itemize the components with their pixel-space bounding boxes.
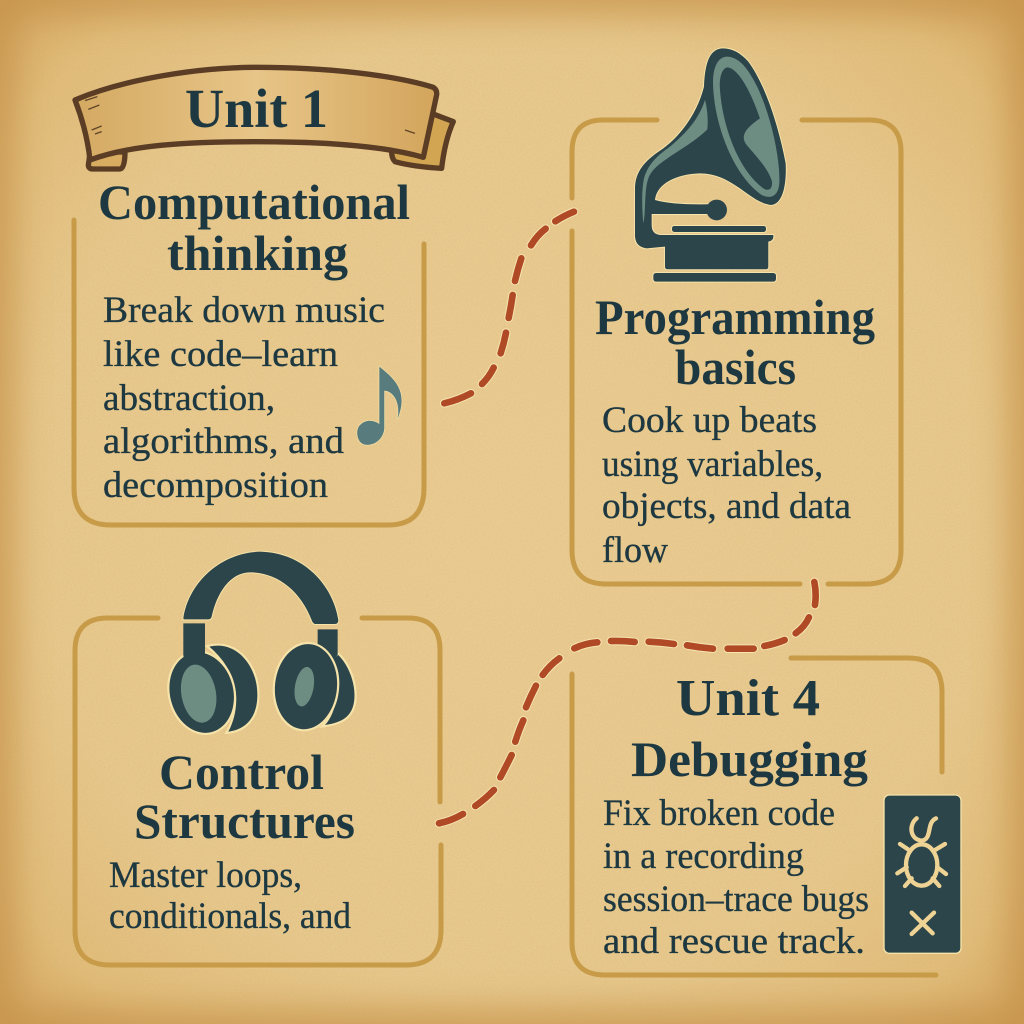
bug	[897, 818, 946, 886]
text: computational thinking description: abstraction,	[103, 378, 275, 419]
gramophone body and horn	[635, 48, 786, 269]
left outer cup	[209, 646, 257, 732]
right stem	[318, 629, 338, 662]
text: computational thinking description: decomposition	[103, 465, 328, 506]
heading: computational thinking	[98, 174, 410, 281]
heading: programming basics: Programming	[595, 289, 875, 345]
platter	[672, 226, 766, 232]
left ear pad	[177, 662, 221, 726]
heading: control structures: Structures	[134, 793, 355, 849]
base plate	[653, 273, 776, 282]
text: computational thinking description: like code–learn	[103, 334, 338, 375]
text: debugging description: Fix broken code	[603, 793, 835, 834]
arm ball	[706, 200, 727, 220]
horn mouth interior	[720, 67, 772, 190]
icon: headphones	[161, 552, 355, 740]
arrow: dashed path from unit 1 to programming basics	[444, 212, 574, 403]
text: computational thinking description	[103, 290, 385, 506]
text: programming basics description: objects, and data	[602, 486, 851, 527]
text: programming basics description: Cook up beats	[602, 400, 817, 441]
left ear cup	[161, 646, 242, 740]
text: debugging description	[603, 793, 869, 962]
text: computational thinking description: Break down music	[103, 290, 385, 331]
right ear cup	[271, 641, 341, 732]
text: control structures description: conditionals, and	[109, 896, 351, 937]
heading: computational thinking: thinking	[167, 225, 348, 281]
text: control structures description: Master loops,	[109, 855, 302, 896]
panel: computational thinking frame	[74, 220, 424, 525]
ribbon right tail	[392, 113, 453, 168]
ribbon scratches	[85, 97, 415, 134]
heading: computational thinking: Computational	[98, 174, 410, 230]
right outer cup	[325, 655, 355, 725]
horn mouth highlight	[713, 57, 779, 197]
text: debugging description: and rescue track.	[603, 921, 865, 962]
heading: unit 1: Unit 1	[185, 78, 328, 139]
text: debugging description: in a recording	[603, 836, 804, 877]
panel: programming basics frame	[572, 120, 901, 584]
heading: programming basics	[595, 289, 875, 395]
text: computational thinking description: algorithms, and	[103, 421, 345, 462]
heading: control structures	[134, 744, 355, 849]
left stem	[183, 623, 205, 657]
card background	[884, 795, 961, 953]
text: control structures description	[109, 855, 351, 937]
icon: gramophone	[635, 48, 786, 282]
heading: unit 4 debugging	[631, 670, 868, 787]
heading: unit 4 debugging: Debugging	[631, 731, 868, 787]
headband	[183, 552, 338, 624]
ribbon main band	[75, 67, 437, 160]
text: debugging description: session–trace bugs	[603, 879, 869, 920]
x mark	[912, 913, 934, 934]
heading: programming basics: basics	[675, 339, 796, 395]
icon: bug card	[884, 795, 961, 953]
icon: music note	[357, 367, 402, 445]
heading: unit 4 debugging: Unit 4	[676, 670, 820, 727]
arrow: dashed path from control structures to debugging	[439, 582, 816, 823]
ribbon left tail	[88, 152, 125, 169]
banner: unit 1 ribbon	[75, 67, 453, 169]
right ear pad	[292, 665, 317, 708]
heading: control structures: Control	[159, 744, 324, 800]
panel: control structures frame	[75, 618, 441, 965]
panel: debugging frame	[572, 658, 942, 975]
text: programming basics description: flow	[602, 530, 668, 571]
text: programming basics description: using variables,	[602, 444, 823, 485]
horn side highlight	[642, 100, 708, 223]
text: programming basics description	[602, 400, 851, 571]
